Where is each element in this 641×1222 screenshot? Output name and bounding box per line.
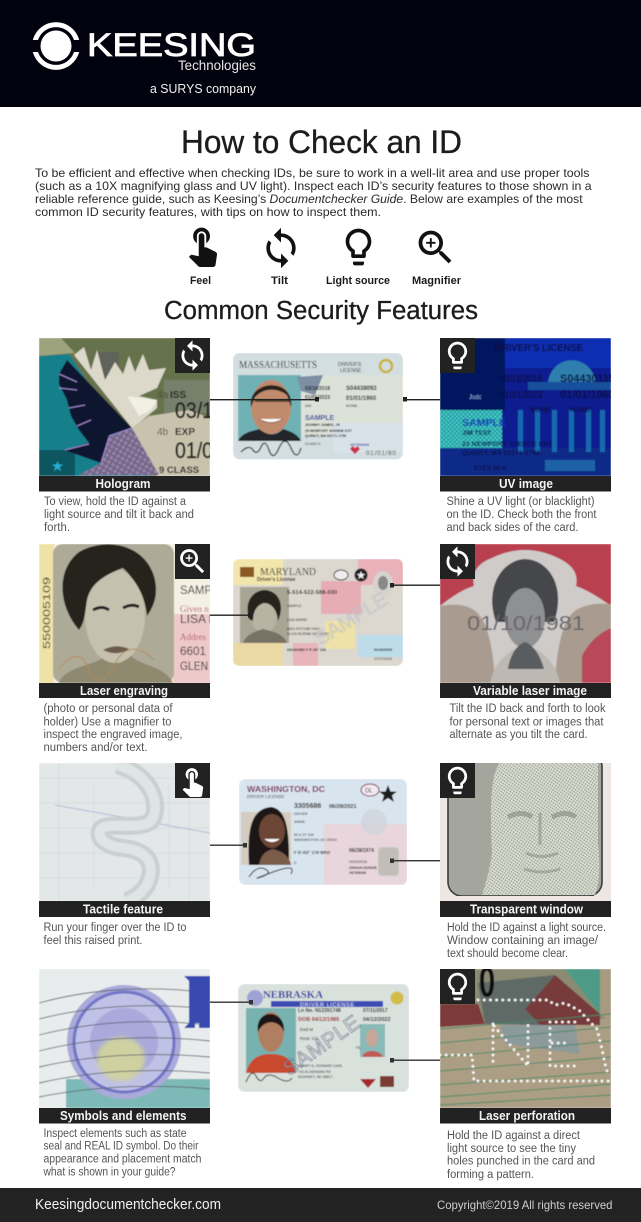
legend labels: Light source — [326, 275, 390, 287]
card: Washington DC: 04/22/2016 — [349, 860, 367, 864]
badge: light — [440, 763, 475, 798]
panel: laser engraving: LISA I — [180, 612, 212, 626]
caption: UV image — [446, 496, 597, 534]
panel: hologram: EXP — [175, 427, 195, 438]
caption: hologram: light source and tilt it back and — [44, 509, 194, 521]
card: Maryland: 01/10/2025 — [374, 648, 392, 652]
intro paragraph — [35, 166, 592, 219]
title: How to Check an ID — [181, 124, 462, 160]
caption: UV image: and back sides of the card. — [446, 522, 578, 534]
panel: laser perforation — [440, 969, 611, 1124]
panel: UV image: DRIVER'S LICENSE — [495, 342, 583, 354]
card: Nebraska — [238, 984, 409, 1092]
panel: UV image: JIM TEST — [462, 430, 491, 437]
card: Maryland: 03/10/1981 F 5'-06" 130 — [287, 648, 326, 652]
card: Nebraska: NEBRASKA — [263, 989, 323, 1001]
legend labels: Magnifier — [412, 275, 462, 287]
caption: transparent window: text should become clear. — [447, 948, 568, 960]
panel: UV image: 03/16/2018 — [500, 374, 542, 385]
caption: laser perforation: holes punched in the card and — [447, 1156, 595, 1168]
label bar: laser engraving: Laser engraving — [80, 684, 168, 698]
card: Washington DC: 06/28/2021 — [329, 804, 357, 810]
panel: variable laser image: 01/10/1981 — [467, 613, 585, 635]
panel: laser engraving: GLEN — [180, 659, 208, 673]
label bar: UV image — [440, 476, 611, 492]
panel: laser engraving: Addres — [180, 632, 206, 642]
card: Washington DC: DRIVER LICENSE — [247, 794, 285, 799]
footer: Copyright©2019 All rights reserved — [437, 1198, 612, 1212]
caption: symbols and elements: seal and REAL ID symbol. Do their — [44, 1140, 199, 1152]
label bar: variable laser image — [440, 683, 611, 698]
intro paragraph: (such as a 10X magnifying glass and UV light). Inspect each ID’s security features to those shown in a — [35, 179, 592, 193]
panel: UV image: 23 NEWPORT AVENUE EXT — [462, 441, 552, 448]
panel: variable laser image — [440, 544, 611, 698]
card: Washington DC: ANNIE — [294, 820, 306, 824]
card: Massachusetts: 01/01/2023 — [305, 395, 330, 401]
legend labels — [190, 275, 462, 287]
card: Washington DC: VETERAN — [349, 871, 367, 875]
card: Nebraska: 742 ALDERMAN RD — [298, 1070, 331, 1074]
caption: tactile feature: feel this raised print. — [44, 935, 142, 947]
card: Massachusetts: NONE — [346, 403, 358, 408]
card: Washington DC: WASHINGTON, DC 20024 — [294, 838, 337, 842]
card: Nebraska: End M — [300, 1027, 313, 1032]
caption: symbols and elements: appearance and placement match — [44, 1154, 202, 1166]
card: Massachusetts: JOHNNY JAMES, JR — [305, 423, 340, 427]
label bar: variable laser image: Variable laser image — [473, 684, 587, 698]
card: Nebraska: Rest: G2 — [300, 1036, 318, 1041]
panel: UV image: QUINCY, MA 02171-1798 — [462, 450, 540, 457]
card: Maryland: 5-514-522-588-030 — [287, 590, 337, 596]
badge: light — [440, 969, 475, 1004]
icon: feel — [189, 228, 217, 267]
card: Maryland: SAMPLE — [287, 604, 302, 608]
card: Massachusetts: SAMPLE — [305, 415, 334, 422]
label bar: UV image: UV image — [499, 477, 553, 491]
card: Washington DC: DL — [365, 788, 373, 794]
icon: magnifier — [419, 231, 451, 263]
card: Washington DC: WASHINGTON, DC — [247, 784, 325, 794]
caption: laser engraving: inspect the engraved image, — [44, 729, 182, 741]
card: Massachusetts: CLASS D — [305, 442, 321, 446]
panel: UV image: 01/01/2023 — [500, 390, 542, 401]
card: Washington DC: 90 K ST SW — [294, 833, 314, 837]
label bar: transparent window — [440, 901, 611, 917]
logo: KEESING — [87, 27, 256, 63]
intro paragraph: To be efficient and effective when checking IDs, be sure to work in a well-lit area and use proper tools — [35, 166, 590, 180]
panel: hologram: ISS — [170, 390, 186, 401]
caption: hologram — [44, 496, 194, 534]
connector lines row 3 — [210, 843, 440, 863]
caption: laser perforation: forming a pattern. — [447, 1169, 534, 1181]
card: Nebraska: 04/12/2022 — [363, 1017, 391, 1023]
card: Nebraska: DRIVER LICENSE — [300, 1002, 354, 1008]
card: Maryland: 07/27/2016 — [374, 657, 392, 661]
card: Maryland: SAMPLE — [311, 588, 392, 650]
caption: laser engraving: (photo or personal data of — [44, 703, 173, 715]
card: Massachusetts: VETERAN — [350, 442, 369, 447]
card: Washington DC: ORGAN DONOR — [349, 866, 377, 870]
card: Nebraska: Hgt — [356, 1045, 364, 1050]
label bar: laser engraving — [39, 683, 210, 698]
caption: laser engraving: numbers and/or text. — [44, 742, 148, 754]
footer: Keesingdocumentchecker.com — [35, 1197, 221, 1213]
label bar: tactile feature: Tactile feature — [83, 902, 163, 916]
card: Washington DC: DRIVER — [294, 812, 308, 816]
panel: laser engraving: Given n — [180, 604, 209, 614]
card: Washington DC: 06/28/1974 — [349, 848, 374, 854]
caption: transparent window — [447, 922, 606, 960]
card: Massachusetts: DRIVER'S — [338, 362, 362, 368]
logo — [33, 22, 256, 96]
card: Washington DC — [239, 779, 407, 885]
connector lines row 4 — [210, 1000, 440, 1062]
badge: feel — [175, 763, 210, 798]
caption: transparent window: Window containing an image/ — [447, 935, 599, 947]
badge: magnifier — [175, 544, 210, 579]
card: Nebraska: Ln No. N12201748 — [298, 1008, 341, 1014]
card: Maryland — [233, 559, 403, 666]
panel: UV image — [440, 338, 615, 492]
panel: hologram: 4b — [157, 427, 169, 438]
card: Maryland: MARYLAND — [260, 567, 316, 578]
card: Massachusetts: LICENSE — [340, 368, 362, 374]
intro paragraph: common ID security features, with tips on how to inspect them. — [35, 205, 381, 219]
caption: tactile feature: Run your finger over the ID to — [44, 922, 186, 934]
caption: variable laser image: for personal text or images that — [450, 716, 604, 728]
panel: hologram: 9 CLASS — [159, 465, 199, 476]
card: Maryland: GLEN BURNIE MD 21062 — [287, 632, 329, 636]
badge: tilt — [440, 544, 475, 579]
card: Washington DC: 3305686 — [294, 803, 321, 810]
card: Nebraska: SAMPLE — [279, 1011, 364, 1080]
card: Massachusetts — [233, 353, 403, 460]
caption: laser engraving: holder) Use a magnifier to — [44, 716, 172, 728]
panel: UV image: NONE — [530, 407, 551, 414]
label bar: laser perforation — [440, 1108, 611, 1124]
panel: tactile feature — [39, 763, 210, 917]
caption: hologram: To view, hold the ID against a — [44, 496, 187, 508]
panel: symbols and elements — [39, 969, 210, 1124]
footer — [0, 1188, 641, 1222]
label bar: laser perforation: Laser perforation — [479, 1109, 575, 1123]
caption: symbols and elements: Inspect elements such as state — [44, 1128, 186, 1140]
caption: laser engraving — [44, 703, 182, 754]
card: Massachusetts: 25 NEWPORT AVENUE EXT — [305, 429, 353, 433]
caption: variable laser image: Tilt the ID back and forth to look — [450, 703, 606, 715]
section heading: Common Security Features — [164, 297, 478, 325]
caption: laser perforation: light source to see the tiny — [447, 1143, 576, 1155]
panel: laser engraving: 550005109 — [41, 577, 53, 649]
card: Nebraska: 07/11/2017 — [363, 1008, 388, 1014]
panel: hologram: 4a — [157, 390, 169, 401]
logo: a SURYS company — [150, 81, 256, 96]
badge: tilt — [175, 338, 210, 373]
connector lines row 2 — [210, 583, 440, 618]
caption: variable laser image: alternate as you tilt the card. — [450, 729, 588, 741]
card: Maryland: LISA MARIE — [287, 618, 308, 622]
caption: UV image: on the ID. Check both the front — [446, 509, 597, 521]
caption: tactile feature — [44, 922, 186, 947]
panel: UV image: 01/01/1960 — [560, 389, 615, 401]
caption: hologram: forth. — [44, 522, 70, 534]
panel: laser engraving — [39, 544, 212, 698]
card: Massachusetts: QUINCY, MA 02171-1796 — [305, 434, 346, 438]
card: Massachusetts: 03/16/2018 — [305, 386, 330, 392]
card: Massachusetts: MASSACHUSETTS — [239, 360, 317, 371]
badge: light — [440, 338, 475, 373]
legend labels: Feel — [190, 275, 211, 287]
label bar: hologram — [39, 476, 210, 492]
card: Massachusetts: S04438092 — [346, 386, 377, 392]
card: Nebraska: DOB 04/12/1985 — [298, 1017, 339, 1023]
caption: variable laser image — [450, 703, 606, 741]
card: Nebraska: HENRY E, HOWARD CARL — [298, 1064, 343, 1068]
card: Maryland: Driver's License — [257, 577, 296, 583]
card: Massachusetts: 01/01/1960 — [346, 396, 377, 402]
panel: UV image: Jsdc — [469, 395, 481, 401]
intro paragraph: reliable reference guide, such as Keesing’s Documentchecker Guide. Below are examples of the most — [35, 192, 583, 206]
card: Washington DC: D — [294, 861, 297, 865]
caption: laser perforation — [447, 1130, 595, 1181]
caption: UV image: Shine a UV light (or blacklight) — [446, 496, 595, 508]
icon: tilt — [266, 228, 296, 268]
connector lines row 1 — [210, 397, 440, 402]
panel: transparent window — [440, 753, 611, 917]
caption: laser perforation: Hold the ID against a direct — [447, 1130, 581, 1142]
card: Nebraska: 234 lb — [368, 1045, 382, 1051]
caption: transparent window: Hold the ID against a light source. — [447, 922, 606, 934]
legend labels: Tilt — [271, 275, 288, 287]
tool legend — [189, 228, 462, 287]
card: Nebraska: KEARNEY, NE 68817 — [298, 1075, 333, 1079]
logo: Technologies — [178, 57, 256, 73]
panel: laser engraving: 6601 — [180, 644, 206, 658]
panel: UV image: NONE — [570, 407, 591, 414]
card: Washington DC: F 5'-03" 170 BRO — [294, 850, 331, 855]
panel: UV image: SAMPLE — [462, 417, 506, 429]
caption: symbols and elements: what is shown in your guide? — [43, 1166, 176, 1178]
panel: hologram — [39, 338, 213, 492]
label bar: symbols and elements: Symbols and elements — [60, 1109, 187, 1123]
label bar: hologram: Hologram — [96, 477, 150, 491]
card: Maryland: 6601 RITCHIE HWY — [287, 627, 320, 631]
icon: light source — [346, 229, 371, 265]
card: Massachusetts: 01/01/60 — [366, 450, 396, 457]
label bar: tactile feature — [39, 901, 210, 917]
card: Massachusetts: DM — [305, 403, 311, 408]
panel: UV image: EYES BLK — [474, 465, 507, 472]
panel: UV image: S04430115 — [560, 373, 615, 385]
header band — [0, 0, 641, 107]
caption: symbols and elements — [43, 1128, 202, 1178]
label bar: transparent window: Transparent window — [470, 902, 583, 916]
